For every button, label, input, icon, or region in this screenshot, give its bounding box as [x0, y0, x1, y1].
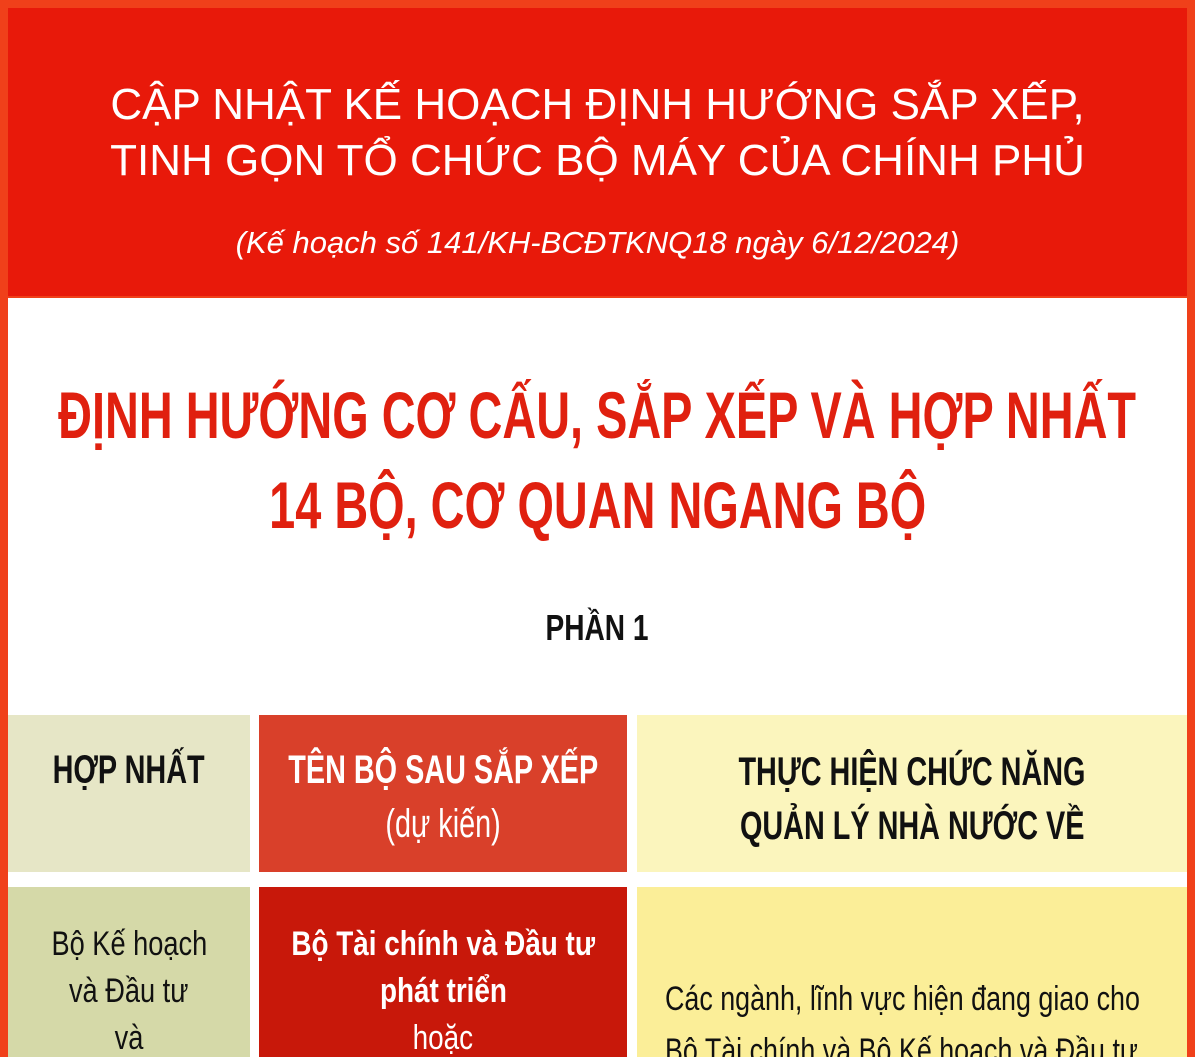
row 1: functions: Các ngành, lĩnh vực hiện đang giao cho — [665, 980, 1140, 1018]
row 1: merged ministries: Bộ Kế hoạch — [51, 925, 207, 963]
row 1: new ministry name: Bộ Tài chính và Đầu tư — [291, 925, 595, 963]
header panel — [8, 8, 1187, 296]
table header: tên bộ: (dự kiến) — [385, 802, 501, 846]
main title: ĐỊNH HƯỚNG CƠ CẤU, SẮP XẾP VÀ HỢP NHẤT — [59, 378, 1136, 452]
table header: chức năng: QUẢN LÝ NHÀ NƯỚC VỀ — [740, 804, 1084, 848]
row 1: merged ministries — [8, 887, 250, 1057]
header title — [110, 80, 1085, 185]
table header: chức năng: THỰC HIỆN CHỨC NĂNG — [739, 750, 1085, 794]
table header: tên bộ: TÊN BỘ SAU SẮP XẾP — [288, 748, 598, 792]
row 1: new ministry name: phát triển — [379, 972, 507, 1010]
row 1: new ministry name — [259, 887, 627, 1057]
row 1: merged ministries: và — [115, 1019, 143, 1057]
white content panel — [8, 298, 1187, 1057]
row 1: functions — [637, 887, 1187, 1057]
subtitle: (Kế hoạch số 141/KH-BCĐTKNQ18 ngày 6/12/2024) — [236, 225, 959, 260]
row 1: new ministry name: hoặc — [413, 1019, 473, 1057]
row 1: merged ministries: và Đầu tư — [69, 972, 189, 1010]
table header: chức năng — [637, 715, 1187, 872]
main title — [58, 378, 1136, 542]
part label: PHẦN 1 — [546, 607, 649, 648]
table header: hợp nhất: HỢP NHẤT — [53, 748, 205, 792]
main title: 14 BỘ, CƠ QUAN NGANG BỘ — [269, 468, 926, 542]
header title: CẬP NHẬT KẾ HOẠCH ĐỊNH HƯỚNG SẮP XẾP, — [110, 80, 1085, 129]
table header: tên bộ — [259, 715, 627, 872]
header title: TINH GỌN TỔ CHỨC BỘ MÁY CỦA CHÍNH PHỦ — [110, 136, 1085, 185]
table header: hợp nhất — [8, 715, 250, 872]
